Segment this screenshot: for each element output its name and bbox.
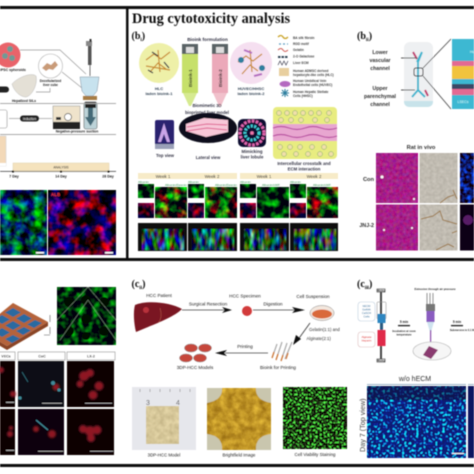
labels: step names: Printing [237,344,253,349]
diagram: crosstalk [273,107,337,159]
label: liver cube: liver cube [43,83,58,87]
icon: syringe bioink 2: Bioink-2 [218,69,223,87]
label: HUVEC bioink: laden bioink-2 [238,91,265,96]
diagram: chip cross-section: LSECs [458,100,469,104]
micrograph: green scaffold [57,287,116,345]
label: 5 min incubation: 5 min [400,320,408,324]
legend [278,36,334,98]
fluorescence: blue [460,153,474,250]
histology: pink [376,153,418,250]
label: bioprinted model: bioprinted liver model [185,110,229,115]
icon: liver [134,302,182,332]
label: Con: Con [363,177,375,183]
icon: model dishes [180,344,212,362]
panel: drug cytotoxicity analysis [132,11,338,251]
label: mixing top: Mixing [377,288,386,292]
labels: step names: HCC Specimen [229,294,261,298]
label: day 7: Day 7 (Top view) [358,398,367,452]
icon: liver cube circle [38,54,62,78]
label: lower channel: vascular [369,58,391,64]
label: upper channel: channel [370,102,390,108]
timeline [0,163,116,178]
pill: step top [0,86,9,92]
icon: dimension marks [44,315,50,335]
icon: spheroid [0,42,20,68]
heading: rat in vivo: Rat in vivo [407,145,436,151]
label: ink A box [358,302,375,321]
label: b-i: (b [132,31,140,42]
panel: printed tissue grid [0,287,116,455]
label: 5 min incubation: Incubation at room [392,329,416,333]
label: HLC bioink: laden bioink-1 [146,91,173,96]
icon: HLC circle [139,43,179,83]
label: bioprinted model: Biomimetic 3D [192,103,222,108]
arrow: printing [215,350,268,356]
icon: collection bottle [84,102,97,129]
label: ink A box: hECM [363,304,371,308]
label: b-ii: ii [366,38,369,43]
heading: w/o hECM: w/o hECM [398,376,431,383]
label: 5 min incubation: temperature [396,332,412,336]
stain captions: Albumin/vWF [262,183,280,187]
label: 5 min submersion: 5 min [453,320,461,324]
legend: hepatocyte-like cells (HLC) [293,73,334,77]
legend: Cells (HHSC) [293,94,313,98]
stain captions: Albumin [188,180,199,184]
label: ink A box: CaSO4 [362,311,372,315]
box: culture [0,136,6,166]
label: lower channel: Lower [372,50,388,56]
3D surface plots [138,223,338,251]
labels: step names: HCC Patient [146,293,172,298]
histology: gray [420,153,458,250]
labels: step names: Digestion [263,302,283,306]
label: liver lobule: Mimicking [241,149,263,154]
label: c-ii: (c [132,279,139,290]
icon: chip [404,42,433,107]
label: mixing bottom: Mixing [377,358,386,362]
arrow: down to model [197,116,217,124]
label: b-i: i [140,38,142,43]
micrographs: cell clusters [0,361,114,455]
legend: Human Umbilical Vein [293,79,326,83]
stain captions: Albumin [290,180,301,184]
labels: step names: Cell Suspension [296,294,330,299]
arrow: induction [9,118,52,120]
micrograph: w/o hECM [367,384,466,458]
stain captions: Albumin/vWF [313,183,331,187]
label: ink B box [358,332,375,347]
legend: RGD motif [293,42,310,46]
week headers: Week 2 [205,174,220,179]
icon: HUVEC circle [230,42,272,84]
legend: 2-O Galactose [293,54,315,58]
photo: 3DP-HCC model: 3 [146,400,150,407]
heading: bioink formulation: Bioink formulation [187,37,228,42]
stain captions: Albumin/Desmin [215,183,237,187]
micrograph: green stain [0,190,47,255]
photo: brightfield [207,388,271,450]
timeline: 14 Day [55,174,67,178]
label: JNJ-2: JNJ-2 [359,223,374,229]
label: c-ii: ii [139,286,143,291]
icon: syringe bioink 1 [182,44,198,106]
icon: pipette [86,39,92,76]
column labels: LX-2 [87,354,95,358]
panel: extrusion printing [357,279,474,458]
captions: images: 3DP-HCC Model [148,452,180,458]
timeline: 28 Day [102,174,114,178]
labels: step names: Surgical Resection [189,302,228,306]
label: upper channel: Upper [372,86,388,92]
icon: funnel [80,77,99,100]
image: lateral view [179,113,237,143]
label: suction: Negative-pressure suction [56,130,98,134]
micrograph: ALB stain [48,190,116,255]
box: outlined step [0,110,7,128]
label: lateral view: Lateral view [196,155,221,160]
label: liver cube: Decellularized [40,79,61,83]
icon: syringe bioink 1: Bioink-1 [188,69,193,87]
micrograph: cell viability [283,387,347,449]
label: gelatin alginate: Alginate(2:1) [306,336,331,341]
captions: images: Brightfield Image [223,452,256,458]
legend: Human Hepatic Stellate [293,90,329,94]
labels: step names: Bioink for Printing [260,365,296,370]
pill: induction: Induction [23,117,36,121]
connector lines [20,50,86,92]
micrographs: week panels [138,184,338,218]
labels: step names [146,293,330,370]
stain captions: Albumin [138,180,149,184]
label: spheroids: iPSC spheroids [0,68,26,72]
week headers: Week 2 [307,174,322,179]
icon: hepatized slices [12,75,36,97]
label: 5 min submersion [450,320,474,332]
icon: cell dish [310,306,334,320]
captions: images [148,452,336,458]
icon: specimen [242,306,252,316]
photo: 3DP-HCC model [132,387,196,450]
photo: 3DP-HCC model: 4 [176,400,180,407]
week headers [138,173,338,179]
zoom lines [423,39,451,109]
label: ink B box: Heparin [362,338,372,342]
label: c-iii: iii [365,286,370,291]
lines to chip [401,58,417,90]
timeline: 7 Day [9,174,19,178]
diagram: chip cross-section [452,39,474,109]
legend: Endothelial cells (HUVEC) [293,83,332,87]
label: b-ii: (b [357,31,366,42]
column labels: CoC [38,354,46,358]
legend: BA silk fibroin [293,36,315,40]
label: c-iii: (c [357,279,365,290]
icon: suction machine [53,106,80,129]
label: liver lobule: liver lobule [241,154,264,160]
column labels [0,352,115,360]
arrow: resection [182,307,232,313]
micrograph: with hECM edge [468,384,474,458]
label: slices: Hepatized SILs [12,99,36,103]
column labels: VECs [1,354,11,358]
dividers [0,103,116,135]
label: ink A box: Cells [363,314,370,318]
panel: bioprinting workflow [0,39,116,255]
label: crosstalk: ECM interaction [288,166,321,172]
label: gelatin alginate: Gelatin(1:1) and [309,327,340,332]
label: extrusion: Extrusion through air pressure [414,287,456,291]
arrow: to bioink [293,323,310,345]
image: top view [155,120,174,149]
icon: bioink tubes [272,342,292,361]
week headers: Week 1 [257,174,272,179]
arrow: digestion [253,307,305,313]
panel: HCC model workflow [132,279,347,458]
label: b-ii: ) [369,31,372,42]
icon: 3D grid scaffold [0,303,48,350]
label: crosstalk: Intercellular crosstalk and [277,161,331,166]
micrograph: ALB stain: ALB [51,192,61,197]
label: upper channel: parenchymal [364,94,397,100]
icon: printed dish [413,342,451,360]
legend: Gelatin [293,48,304,52]
week headers: Week 1 [156,174,171,179]
icon: syringe bioink 2 [212,44,228,106]
stain captions [138,180,331,187]
label: 5 min incubation [392,320,416,336]
label: 5 min submersion: Submersion in 0.1 M [450,329,474,332]
label: lower channel: channel [370,66,390,72]
icon: mixing syringes [377,289,386,362]
label: c-iii: ) [369,279,372,290]
icon: extrusion syringe [426,293,435,346]
legend: Human ADMSC derived [293,69,329,73]
labels: step names: 3DP-HCC Models [177,365,214,370]
label: ink B box: Alginate [361,335,372,339]
label: ink A box: GelMA [362,308,371,312]
pill: induction [20,116,39,122]
label: c-ii: ) [142,279,145,290]
title: Drug cytotoxicity analysis [132,11,290,27]
timeline: ANALYSIS [53,166,69,170]
image: liver lobule [238,119,266,147]
stain captions: Albumin/Desmin [165,183,187,187]
label: b-i: ) [142,31,145,42]
panel: liver chip and rat [357,31,474,250]
stain captions: Albumin [240,180,251,184]
label: HUVEC bioink: HUVEC/HHSC [238,86,264,91]
label: top view: Top view [156,153,175,158]
label: HLC bioink: HLC [155,86,163,91]
captions: images: Cell Viability Staining [295,452,336,457]
legend: Liver ECM [293,61,309,65]
